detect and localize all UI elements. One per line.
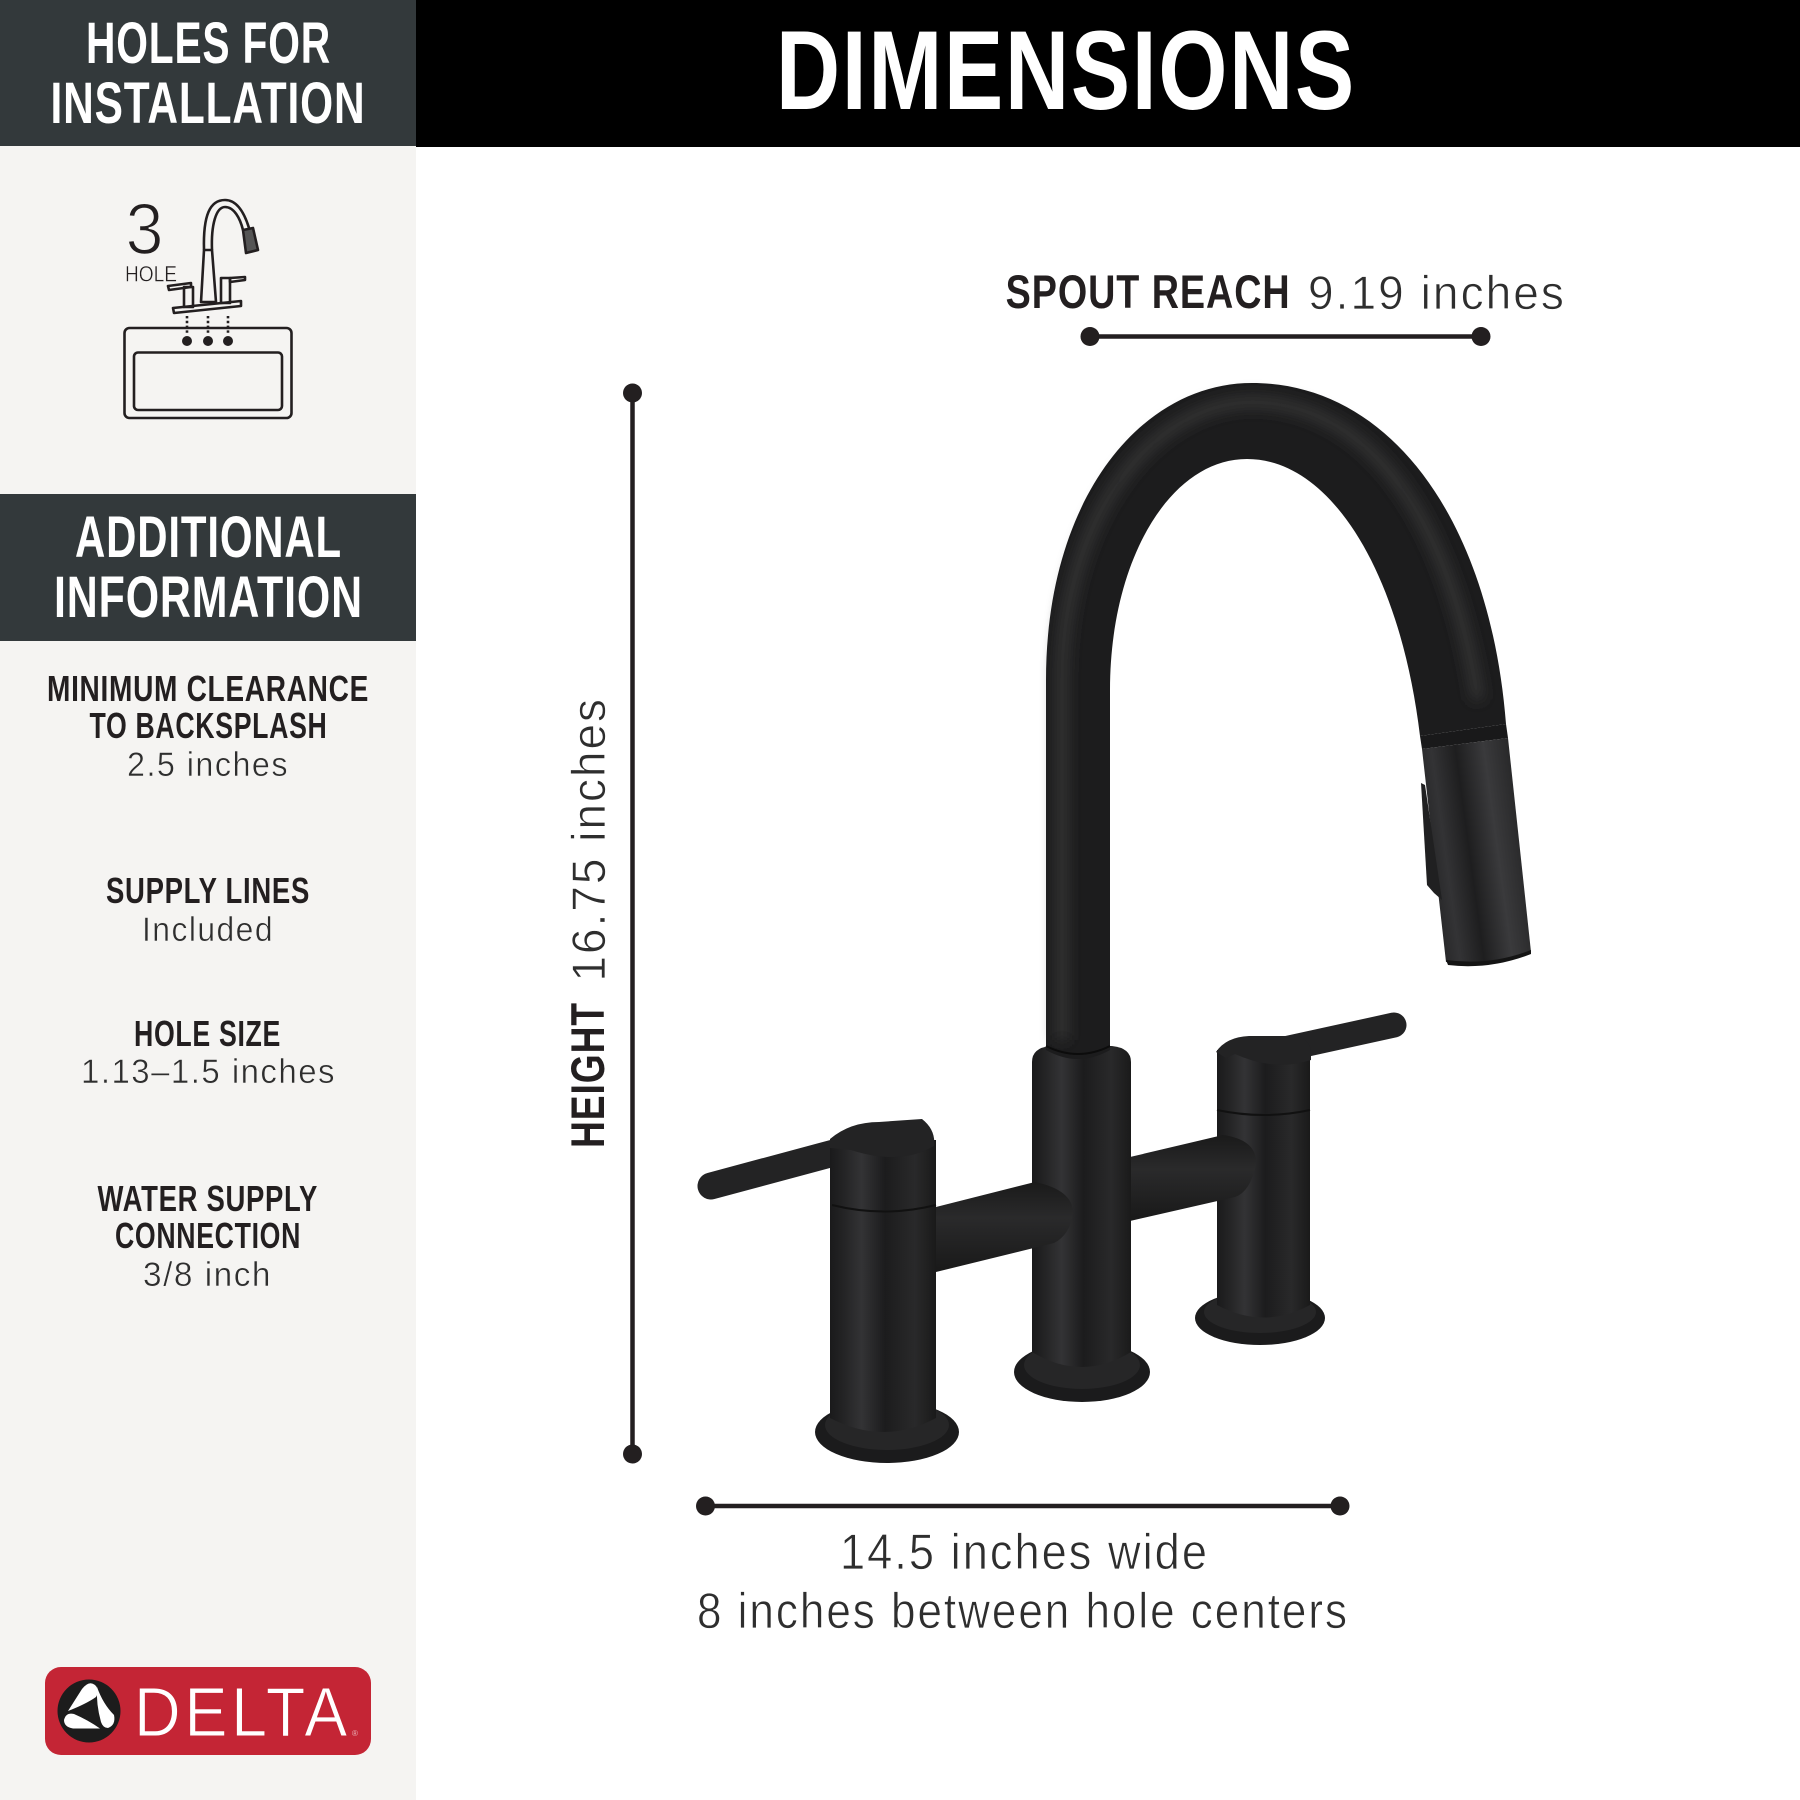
spray head	[1420, 724, 1531, 966]
text block: water supply connection: CONNECTION	[115, 1215, 301, 1256]
faucet illustration	[711, 383, 1531, 1463]
header: additional information: INFORMATION	[54, 565, 363, 630]
text block: minimum clearance	[47, 668, 369, 784]
text block: supply lines: Included	[142, 911, 274, 949]
logo: Delta: DELTA	[134, 1673, 351, 1751]
header: holes for installation: HOLES FOR	[86, 11, 331, 76]
text block: minimum clearance: TO BACKSPLASH	[90, 705, 328, 746]
text block: water supply connection: WATER SUPPLY	[98, 1178, 318, 1219]
text block: supply lines: SUPPLY LINES	[106, 870, 310, 911]
gooseneck spout	[1046, 383, 1506, 1059]
text block: water supply connection	[98, 1178, 318, 1294]
logo: Delta: ®	[352, 1729, 358, 1738]
header: additional information: ADDITIONAL	[75, 505, 342, 570]
right valve	[1195, 1025, 1394, 1345]
text block: supply lines	[106, 870, 310, 949]
spout reach dimension	[1006, 265, 1566, 346]
text block: hole size: HOLE SIZE	[134, 1013, 281, 1054]
icon: three hole sink and faucet: HOLE	[125, 262, 177, 286]
text block: water supply connection: 3/8 inch	[143, 1256, 272, 1294]
header: holes for installation	[0, 0, 416, 146]
width dimension	[696, 1496, 1350, 1639]
logo: Delta	[45, 1667, 371, 1755]
icon: three hole sink and faucet	[124, 190, 292, 418]
spout reach dimension: 9.19 inches	[1308, 266, 1566, 319]
center column	[1014, 1046, 1150, 1402]
spout reach dimension: SPOUT REACH	[1006, 265, 1291, 318]
left sidebar panel	[0, 0, 416, 1800]
header: dimensions: DIMENSIONS	[776, 8, 1356, 133]
width dimension: 14.5 inches wide	[840, 1524, 1209, 1580]
text block: minimum clearance: 2.5 inches	[127, 746, 289, 784]
header: additional information	[0, 494, 416, 641]
text block: hole size	[81, 1013, 336, 1091]
text block: minimum clearance: MINIMUM CLEARANCE	[47, 668, 369, 709]
header: dimensions	[416, 0, 1800, 147]
height dimension: 16.75 inches	[562, 697, 615, 982]
right crossbar	[1130, 1135, 1256, 1221]
icon: three hole sink and faucet: 3	[126, 190, 164, 270]
header: holes for installation: INSTALLATION	[50, 71, 366, 136]
left valve	[711, 1119, 959, 1463]
left crossbar	[936, 1182, 1073, 1272]
height dimension: HEIGHT	[561, 1002, 614, 1148]
width dimension: 8 inches between hole centers	[697, 1583, 1349, 1639]
height dimension	[561, 384, 642, 1464]
text block: hole size: 1.13–1.5 inches	[81, 1053, 336, 1091]
